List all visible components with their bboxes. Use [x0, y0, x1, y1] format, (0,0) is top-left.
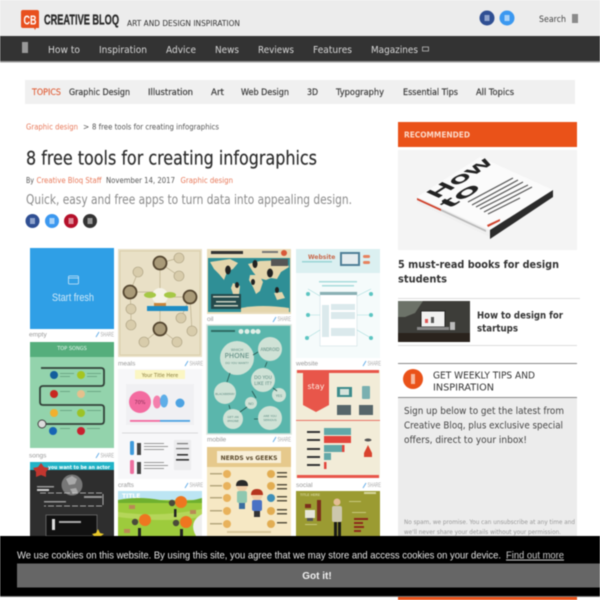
thumbnail: mobile: PHONE [225, 352, 249, 360]
navigation bar: Inspiration [99, 45, 147, 56]
byline: By [26, 176, 34, 185]
got it button: Got it! [302, 571, 332, 582]
newsletter heading [433, 370, 535, 394]
breadcrumb: 8 free tools for creating infographics [92, 122, 219, 132]
article heading: 5 must-read books for design [398, 259, 559, 271]
thumbnail: mobile: DO YOU [254, 375, 272, 381]
sidebar: recommended [398, 122, 580, 346]
got it button [17, 564, 600, 588]
thumbnail: actor: you want to be an actor [48, 465, 110, 471]
thumbnail: oil map: oil [207, 316, 214, 323]
topics bar: Graphic Design [69, 88, 130, 98]
thumbnail: mobile: WHICH [231, 348, 243, 352]
navigation bar: How to [48, 45, 80, 56]
byline: Creative Bloq Staff [36, 176, 102, 185]
article heading 2: startups [477, 324, 518, 334]
breadcrumb: > [83, 122, 89, 132]
topics bar: Illustration [148, 88, 193, 98]
thumbnail: mobile: ARE YOU [263, 414, 277, 418]
thumbnail: mobile [207, 325, 291, 444]
topics bar: All Topics [476, 88, 515, 98]
share icons [26, 214, 97, 228]
thumbnail: mobile: NO [248, 402, 254, 406]
breadcrumb [26, 122, 219, 132]
thumbnail: songs [29, 342, 114, 460]
thumbnail: mobile: BLACKBERRY [215, 392, 235, 396]
icon: twitter [500, 10, 514, 26]
thumbnail: mobile: DO YOU WANT? [225, 361, 249, 365]
byline [26, 176, 233, 185]
thumbnail: social: stay [308, 382, 325, 391]
thumbnail: nerds vs geeks: NERDS vs GEEKS [221, 455, 277, 462]
byline: Graphic design [180, 176, 233, 185]
header bar [0, 0, 600, 36]
topics bar: Essential Tips [403, 88, 459, 98]
logo [21, 10, 119, 30]
thumbnail: mobile: SERIOUS [263, 418, 277, 422]
topics bar: Art [211, 88, 225, 98]
newsletter body: Creative Bloq, plus exclusive special [404, 420, 563, 432]
thumbnail: empty: Start fresh [52, 292, 94, 304]
newsletter heading: GET WEEKLY TIPS AND [433, 370, 535, 382]
newsletter body: offers, direct to your inbox! [404, 435, 527, 446]
topics bar: Web Design [241, 88, 289, 98]
logo: CREATIVE BLOQ [44, 12, 119, 28]
photo: laptop [398, 301, 470, 342]
article heading: students [398, 274, 447, 286]
navigation bar: Magazines [371, 45, 418, 56]
icon: email [403, 369, 423, 389]
cookie bar [0, 536, 600, 597]
thumbnail: songs: SHARE [100, 454, 114, 460]
thumbnail: mobile: ANDROID [260, 347, 280, 352]
thumbnail: social [296, 370, 381, 489]
icon: dropdown [422, 47, 428, 51]
thumbnail: title landscape [118, 491, 202, 536]
thumbnail: crafts [118, 369, 203, 489]
thumbnail: title landscape: TITLE [122, 493, 140, 500]
thumbnail: meals: SHARE [190, 362, 203, 368]
byline: November 14, 2017 [106, 176, 175, 185]
thumbnail: social: SHARE [368, 483, 381, 489]
navigation bar: Advice [166, 45, 196, 56]
recommended header: RECOMMENDED [404, 130, 470, 140]
thumbnail: songs: TOP SONGS [56, 346, 87, 352]
newsletter heading: INSPIRATION [433, 382, 494, 394]
article heading 2 [477, 310, 563, 334]
article heading [398, 259, 559, 286]
thumbnail: nerds vs geeks [207, 447, 291, 536]
thumbnail: social: social [296, 482, 313, 489]
thumbnail: website: website [295, 360, 318, 368]
thumbnail: website: SHARE [368, 362, 381, 368]
disclaimer: No spam, we promise. You can unsubscribe at any time and [404, 519, 575, 526]
icon: facebook [480, 10, 494, 26]
article title: 8 free tools for creating infographics [26, 148, 317, 170]
topics bar: TOPICS [31, 88, 61, 98]
search: Search [539, 15, 566, 25]
thumbnail: empty: empty [29, 332, 47, 338]
thumbnail: mobile: mobile [207, 436, 227, 444]
breadcrumb: Graphic design [26, 122, 78, 132]
topics bar: Typography [335, 88, 384, 98]
thumbnail: crafts: crafts [118, 482, 135, 489]
navigation bar: Reviews [258, 45, 294, 56]
thumbnail: crafts: 70% [134, 400, 146, 406]
thumbnail: empty [29, 248, 114, 338]
topics bar: 3D [307, 88, 318, 98]
cookie message: We use cookies on this website. By using this site, you agree that we may store and access cookies on your device. [17, 550, 501, 562]
newsletter body: Sign up below to get the latest from [404, 406, 564, 417]
thumbnail: songs: songs [29, 452, 47, 460]
thumbnail: website [295, 249, 381, 368]
orange strip below cookie bar [398, 597, 577, 600]
book image [398, 150, 577, 250]
topics bar [25, 80, 575, 104]
logo: CB [24, 12, 36, 28]
thumbnail: mobile: IPHONE [227, 419, 239, 423]
book image: to [434, 181, 487, 211]
subheading: Quick, easy and free apps to turn data into appealing design. [26, 193, 352, 208]
icon: menu [22, 42, 28, 53]
thumbnail: oil map: SHARE [278, 317, 291, 323]
thumbnail: crafts: SHARE [190, 483, 203, 489]
thumbnail: olive profile: TITLE HERE [299, 493, 320, 497]
article heading 2: How to design for [477, 310, 563, 322]
disclaimer [404, 519, 575, 536]
thumbnail: mobile: SHARE [278, 438, 291, 444]
navigation bar [0, 36, 600, 62]
thumbnail: oil map [207, 249, 291, 323]
newsletter panel [398, 363, 577, 536]
thumbnail: mobile: LIKE IT? [254, 381, 272, 387]
thumbnail: meals: meals [118, 360, 136, 368]
disclaimer: we'll never share your details without your permission. [404, 529, 561, 536]
thumbnail: mobile: GET AN [227, 415, 239, 419]
navigation bar: News [215, 45, 239, 56]
cookie link: Find out more [506, 550, 564, 562]
recommended header [398, 122, 577, 147]
thumbnail: mobile: YES [276, 394, 283, 398]
thumbnail: meals [118, 249, 203, 368]
thumbnail: actor [30, 462, 114, 536]
tagline: ART AND DESIGN INSPIRATION [127, 19, 240, 28]
navigation bar: Features [313, 45, 352, 56]
book image: How [422, 155, 500, 201]
thumbnail: website: Website [308, 254, 335, 261]
thumbnail: olive profile [296, 491, 380, 536]
newsletter body [404, 406, 564, 446]
thumbnail: empty: SHARE [100, 332, 114, 338]
thumbnail: crafts: Your Title Here [141, 373, 178, 379]
